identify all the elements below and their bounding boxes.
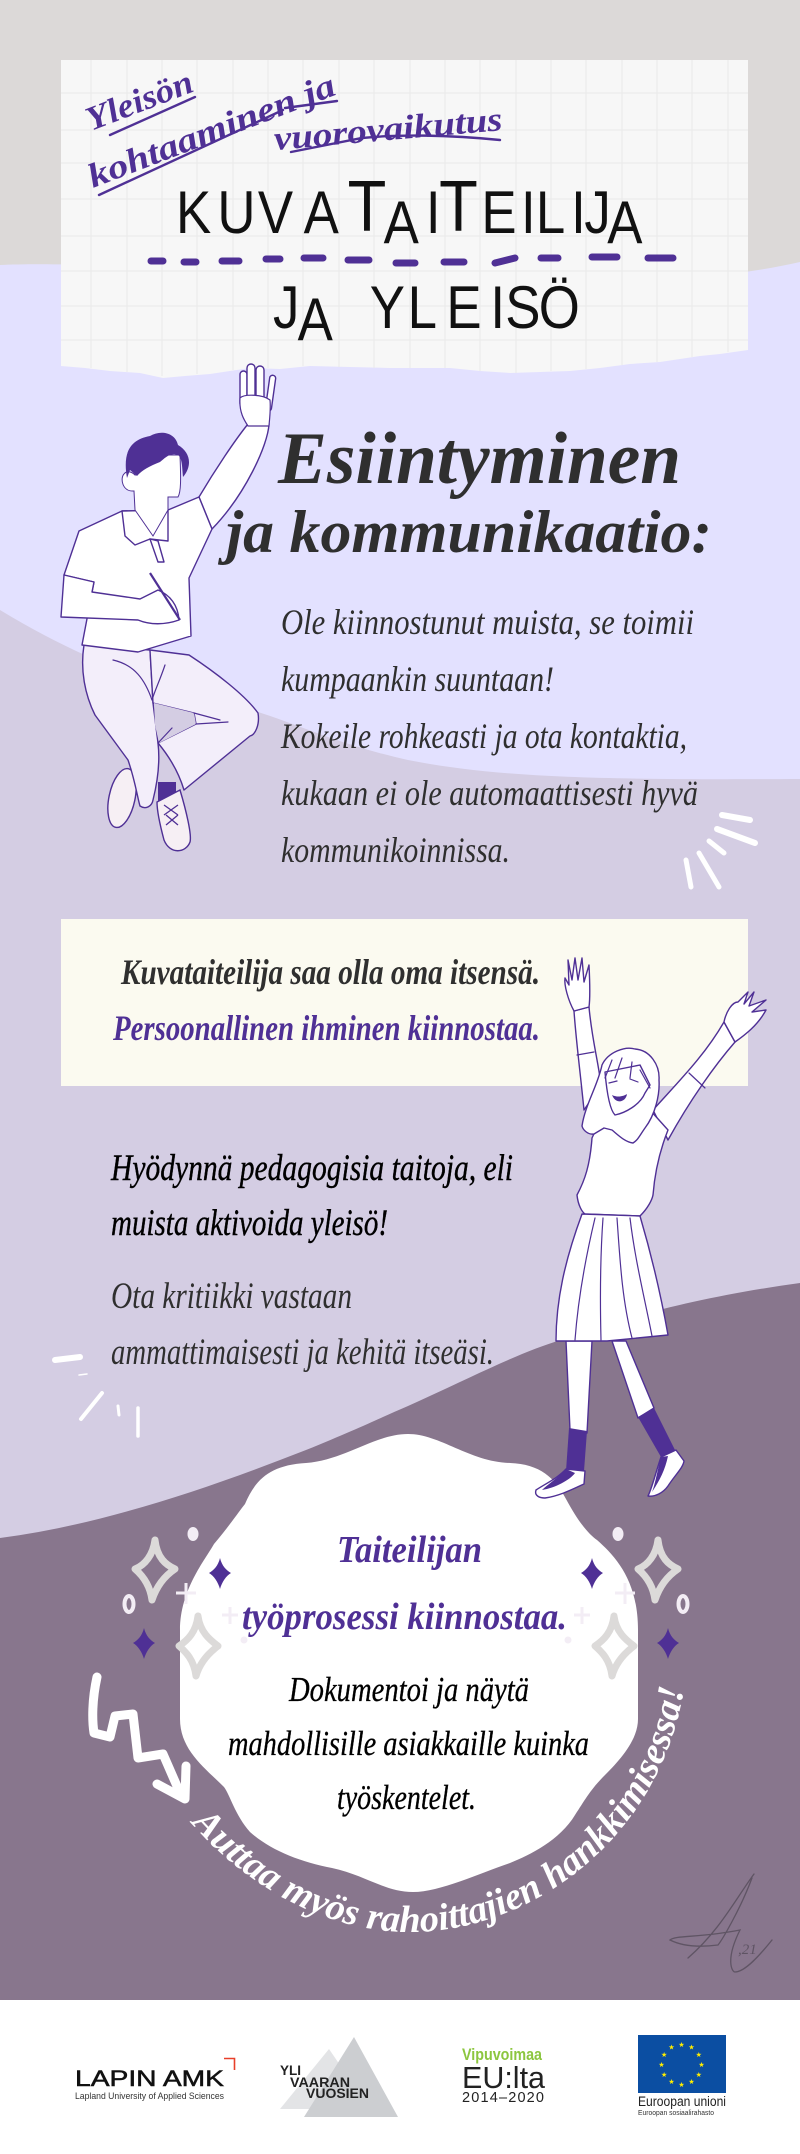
logo: European Union flag: Euroopan sosiaalirahasto bbox=[638, 2110, 714, 2117]
logo: Vipuvoimaa EU:lta: Vipuvoimaa bbox=[462, 2046, 543, 2064]
illustration: jumping man with pen bbox=[61, 364, 276, 851]
icon: small purple sparkles bbox=[133, 1558, 679, 1659]
blob heading: työprosessi kiinnostaa: työprosessi kiinnostaa. bbox=[242, 1596, 567, 1638]
man: right shoe bbox=[157, 790, 190, 851]
logo: Yli vaaran vuosien bbox=[280, 2037, 398, 2117]
girl: sleeve cuff right bbox=[689, 1073, 705, 1088]
blob body text: työskentelet. bbox=[337, 1778, 476, 1817]
logo: European Union flag: ★ bbox=[658, 2061, 665, 2069]
text block: pedagogical skills bbox=[110, 1148, 513, 1244]
logo: Lapin AMK: LAPIN AMK bbox=[75, 2066, 224, 2091]
logo: European Union flag: ★ bbox=[696, 2051, 702, 2059]
girl: left leg bbox=[566, 1341, 592, 1433]
man: placket bbox=[150, 539, 164, 562]
curved text: Auttaa myös rahoittajien hankkimisessa: Auttaa myös rahoittajien hankkimisessa! bbox=[190, 1686, 683, 1932]
man: pen bbox=[150, 573, 180, 620]
logo: Lapin AMK: Lapland University of Applied Sciences bbox=[75, 2091, 224, 2102]
girl: eyes bbox=[609, 1079, 638, 1083]
girl: smile bbox=[612, 1094, 627, 1101]
man: sock bbox=[158, 782, 176, 802]
text block: criticism bbox=[111, 1276, 494, 1373]
girl: right sock bbox=[638, 1408, 676, 1457]
logo: Vipuvoimaa EU:lta bbox=[462, 2046, 546, 2106]
heading: ja kommunikaatio: ja kommunikaatio: bbox=[218, 499, 712, 565]
title: KUVATAITEILIJA: T bbox=[439, 167, 478, 247]
logo: European Union flag: ★ bbox=[696, 2071, 702, 2079]
title: JA YLEISÖ: J bbox=[273, 274, 299, 341]
logo: Yli vaaran vuosien: VAARAN bbox=[290, 2075, 350, 2090]
logo: European Union flag: ★ bbox=[678, 2041, 685, 2049]
title: KUVATAITEILIJA bbox=[176, 167, 643, 256]
man: gap between legs bbox=[154, 703, 196, 743]
icon: small oval sparkles bbox=[124, 1527, 688, 1644]
subtitle underlines bbox=[99, 97, 500, 195]
girl: left shoe bbox=[536, 1469, 585, 1498]
title: JA YLEISÖ bbox=[273, 274, 580, 353]
man: forearm and hand bbox=[61, 575, 179, 624]
logo: European Union flag: ★ bbox=[668, 2078, 675, 2086]
text block: criticism: Ota kritiikki vastaan bbox=[111, 1276, 352, 1317]
background: lavender wave bbox=[0, 262, 800, 800]
background: grey top band bbox=[0, 0, 800, 300]
title: KUVATAITEILIJA: A bbox=[384, 189, 419, 256]
subtitle: Yleisön: Yleisön bbox=[81, 64, 198, 138]
blob body text: mahdollisille asiakkaille kuinka bbox=[228, 1724, 589, 1763]
girl: right shoe bbox=[648, 1450, 684, 1496]
arrow: white zigzag bbox=[93, 1677, 186, 1799]
logo: European Union flag: ★ bbox=[668, 2044, 675, 2052]
logo: European Union flag bbox=[638, 2035, 726, 2117]
girl: face bbox=[605, 1065, 650, 1115]
blob body text: Dokumentoi ja näytä bbox=[288, 1670, 529, 1709]
girl: right leg bbox=[612, 1341, 654, 1418]
text block: communication advice: kumpaankin suuntaan! bbox=[281, 659, 554, 699]
man: shirt bbox=[64, 497, 212, 652]
girl: left shoe sole stripe bbox=[542, 1469, 575, 1490]
text block: communication advice: Kokeile rohkeasti ja ota kontaktia, bbox=[280, 716, 687, 756]
logo: European Union flag: ★ bbox=[688, 2044, 695, 2052]
girl: left arm bbox=[574, 1007, 601, 1110]
panel: cream callout box bbox=[61, 919, 748, 1086]
text block: communication advice: Ole kiinnostunut muista, se toimii bbox=[281, 602, 694, 642]
logo: Yli vaaran vuosien: YLI bbox=[280, 2063, 301, 2078]
heading: Esiintyminen: Esiintyminen bbox=[277, 418, 681, 500]
text block: communication advice bbox=[280, 602, 698, 870]
title: KUVATAITEILIJA: I bbox=[426, 179, 441, 246]
title: JA YLEISÖ: YLEISÖ bbox=[370, 274, 580, 341]
man: collar bbox=[122, 510, 168, 545]
dashed purple divider bbox=[151, 257, 673, 263]
man: palm bbox=[240, 395, 270, 426]
logo: Lapin AMK bbox=[75, 2058, 234, 2102]
signature: ,21 bbox=[738, 1942, 757, 1958]
girl: left hand bbox=[565, 958, 590, 1011]
girl: hair and head bbox=[582, 1048, 659, 1143]
logo: Vipuvoimaa EU:lta: 2014–2020 bbox=[462, 2090, 544, 2106]
man: raised arm bbox=[199, 424, 269, 529]
girl: skirt bbox=[556, 1214, 668, 1341]
illustration: cheering girl bbox=[536, 958, 766, 1498]
man: left shoe bbox=[103, 766, 141, 830]
footer background bbox=[0, 2000, 800, 2154]
man: hair bbox=[126, 433, 189, 478]
text block: communication advice: kommunikoinnissa. bbox=[281, 830, 510, 870]
title: KUVATAITEILIJA: A bbox=[607, 189, 643, 256]
logo: European Union flag: ★ bbox=[678, 2081, 685, 2089]
title: KUVATAITEILIJA: T bbox=[348, 167, 386, 247]
icon: large grey sparkles bbox=[135, 1540, 678, 1676]
girl: skirt pleats bbox=[575, 1218, 652, 1340]
man: left trouser leg bbox=[83, 645, 159, 808]
background: lilac wave bbox=[0, 610, 800, 1600]
callout text: oma itsensä: Kuvataiteilija saa olla oma itsensä. bbox=[120, 952, 540, 992]
text block: pedagogical skills: Hyödynnä pedagogisia taitoja, eli bbox=[110, 1148, 513, 1189]
panel: white wavy blob bbox=[180, 1434, 638, 1892]
title: JA YLEISÖ: A bbox=[298, 286, 333, 353]
text block: communication advice: kukaan ei ole automaattisesti hyvä bbox=[281, 773, 698, 813]
title: KUVATAITEILIJA: KUVA bbox=[176, 179, 339, 246]
callout text: persoonallinen: Persoonallinen ihminen kiinnostaa. bbox=[112, 1008, 540, 1048]
subtitle: vuorovaikutus: vuorovaikutus bbox=[272, 101, 504, 158]
title: KUVATAITEILIJA: EILIJ bbox=[481, 179, 611, 246]
girl: sleeve cuff left bbox=[577, 1052, 594, 1055]
girl: left sock bbox=[566, 1428, 587, 1471]
icon: white sparks right bbox=[686, 815, 755, 887]
blob body text bbox=[228, 1670, 589, 1817]
text block: criticism: ammattimaisesti ja kehitä itseäsi. bbox=[111, 1332, 494, 1373]
icon: white sparks left bbox=[55, 1357, 138, 1436]
girl: right arm bbox=[653, 1022, 735, 1140]
logo: Vipuvoimaa EU:lta: EU:lta bbox=[462, 2060, 546, 2095]
background: dark mauve wave bbox=[0, 1283, 800, 2000]
text block: pedagogical skills: muista aktivoida yleisö! bbox=[111, 1203, 388, 1244]
logo: European Union flag: ★ bbox=[661, 2051, 667, 2059]
girl: fringe lines bbox=[605, 1058, 650, 1088]
logo: European Union flag: ★ bbox=[661, 2071, 667, 2079]
man: neck and face bbox=[122, 455, 181, 536]
logo: European Union flag: ★ bbox=[688, 2078, 695, 2086]
icon: faint crosses bbox=[176, 1583, 635, 1624]
man: trouser creases bbox=[113, 660, 228, 743]
logo: European Union flag: Euroopan unioni bbox=[638, 2094, 726, 2109]
subtitle: kohtaaminen ja: kohtaaminen ja bbox=[83, 67, 340, 195]
logo: Yli vaaran vuosien: VUOSIEN bbox=[306, 2086, 369, 2101]
girl: right shoe stripe bbox=[652, 1456, 668, 1492]
logo: European Union flag: ★ bbox=[698, 2061, 705, 2069]
girl: right hand bbox=[724, 992, 766, 1042]
man: shoe laces bbox=[164, 805, 178, 825]
girl: sweater bbox=[577, 1110, 668, 1216]
man: fingers bbox=[240, 371, 247, 407]
panel: torn grid paper title bbox=[61, 60, 748, 378]
blob heading: Taiteilijan: Taiteilijan bbox=[337, 1529, 482, 1571]
signature bbox=[670, 1874, 772, 1972]
man: right trouser leg bbox=[150, 650, 258, 790]
